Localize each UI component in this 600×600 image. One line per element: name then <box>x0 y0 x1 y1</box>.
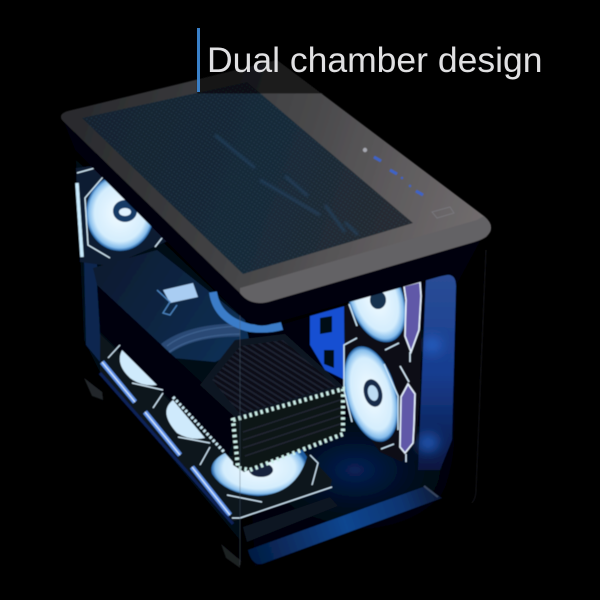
title: Dual chamber design <box>207 40 542 80</box>
fan: left top <box>76 165 170 266</box>
top panel <box>61 60 491 303</box>
plate light lines <box>108 345 332 518</box>
mesh panel <box>82 82 413 274</box>
blue light strip <box>418 275 456 470</box>
right chamber window <box>244 275 456 566</box>
rear blue bracket <box>310 306 345 380</box>
black frame band below top panel <box>62 118 482 326</box>
case render <box>61 28 491 578</box>
front lip <box>240 216 491 303</box>
graphics card backplate <box>93 250 282 362</box>
side connectors <box>102 362 230 515</box>
front IO ports <box>363 148 454 218</box>
glass corner seam <box>239 315 241 565</box>
connector: upper side <box>404 282 421 352</box>
fan: bottom three <box>211 440 307 496</box>
LED trim <box>233 389 343 470</box>
bottom vent <box>243 497 338 542</box>
rail LED edge <box>173 397 225 453</box>
case body <box>62 118 488 578</box>
blue cooling tube <box>213 292 282 329</box>
fan: bottom row <box>100 334 338 542</box>
fan: bottom two <box>166 400 205 439</box>
left chamber interior <box>76 160 240 540</box>
graphics card cooler <box>200 334 345 472</box>
card side rail <box>97 285 240 456</box>
title accent line <box>197 28 200 92</box>
fan: right lower <box>334 338 408 449</box>
blue underside line <box>100 373 233 524</box>
logo chip <box>163 283 198 303</box>
floor light <box>248 487 442 564</box>
title band overlay <box>197 28 362 94</box>
cable bundle <box>165 330 240 349</box>
fan: right top <box>335 246 417 350</box>
fan: bottom one <box>120 350 157 385</box>
right fan column <box>334 246 422 462</box>
mesh interior shapes <box>215 135 358 235</box>
connector: lower side <box>400 384 415 453</box>
power button <box>432 207 454 218</box>
